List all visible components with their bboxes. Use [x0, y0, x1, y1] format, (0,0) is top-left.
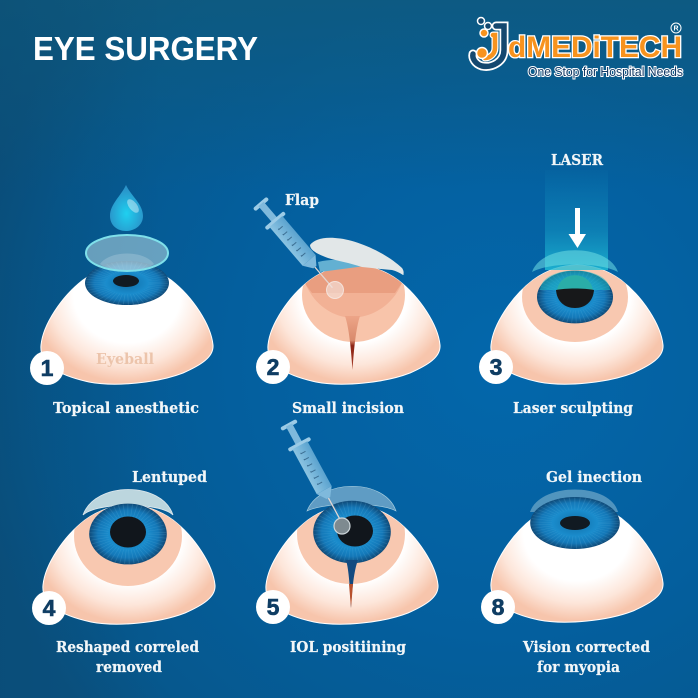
number badge 4: 4	[43, 595, 56, 621]
eyeball label: Eyeball	[96, 351, 154, 368]
iris	[530, 497, 620, 549]
laser beam	[532, 170, 618, 290]
iris	[89, 504, 167, 564]
incision	[345, 316, 360, 370]
eyeball	[43, 505, 215, 624]
number badge 3: 3	[490, 354, 502, 380]
incision	[346, 560, 358, 608]
step 3 caption: Laser sculpting	[513, 400, 633, 417]
step 1: topical anesthetic	[30, 185, 213, 417]
icon: logo J mark	[473, 18, 504, 66]
pink ring	[297, 511, 405, 584]
eyeball	[491, 503, 663, 622]
pink ring	[74, 507, 182, 586]
number badge 5: 5	[267, 594, 280, 620]
pupil	[556, 275, 594, 308]
contact lens	[86, 235, 168, 271]
exposed tissue	[302, 266, 405, 342]
eyeball	[268, 265, 440, 384]
step 8 caption	[522, 639, 650, 676]
air bubble	[326, 282, 344, 298]
iris	[313, 501, 391, 563]
logo tagline: One Stop for Hospital Needs	[528, 65, 683, 79]
step 8 caption: Vision corrected	[522, 639, 650, 656]
lentuped label: Lentuped	[132, 469, 207, 486]
syringe	[277, 417, 352, 528]
number badge 5	[256, 590, 290, 624]
title: EYE SURGERY	[33, 30, 258, 67]
gel cap	[530, 490, 618, 512]
step 8 caption: for myopia	[537, 659, 621, 676]
eyeball	[41, 265, 213, 384]
number badge 8: 8	[492, 594, 505, 620]
iris	[537, 271, 613, 323]
pink ring	[522, 265, 628, 342]
logo wordmark: dMEDiTECH	[508, 31, 682, 64]
step 5 caption: IOL positiining	[290, 639, 406, 656]
iris	[85, 261, 169, 305]
flap label: Flap	[285, 192, 319, 209]
step 4: reshaped cornea removed	[32, 469, 215, 676]
step 2: small incision	[250, 192, 440, 417]
number badge 2	[256, 350, 290, 384]
step 1 caption: Topical anesthetic	[53, 400, 199, 417]
registered mark	[671, 23, 681, 33]
number badge 3	[479, 350, 513, 384]
registered mark: R	[673, 26, 679, 32]
step 4 caption: Reshaped correled	[56, 639, 199, 656]
eyeball	[491, 265, 663, 384]
number badge 1: 1	[41, 355, 54, 381]
corneal flap	[310, 238, 404, 275]
arrow	[568, 208, 586, 248]
step 4 caption: removed	[96, 659, 162, 676]
logo: JD Meditech	[473, 18, 683, 79]
number badge 4	[32, 591, 66, 625]
icon: water drop	[110, 185, 143, 231]
step 8: vision corrected	[481, 469, 663, 676]
step 4 caption	[56, 639, 199, 676]
number badge 2: 2	[267, 354, 279, 380]
corneal cap	[307, 486, 396, 511]
eyeball	[266, 505, 438, 624]
gel injection label: Gel inection	[546, 469, 642, 486]
step 2 caption: Small incision	[292, 400, 404, 417]
lenticule cap	[83, 490, 173, 515]
number badge 8	[481, 590, 515, 624]
number badge 1	[30, 351, 64, 385]
step 5: IOL positioning	[256, 417, 438, 656]
laser label: LASER	[551, 152, 604, 169]
step 3: laser sculpting	[479, 152, 663, 417]
intraocular lens	[334, 518, 350, 534]
syringe	[250, 194, 342, 296]
